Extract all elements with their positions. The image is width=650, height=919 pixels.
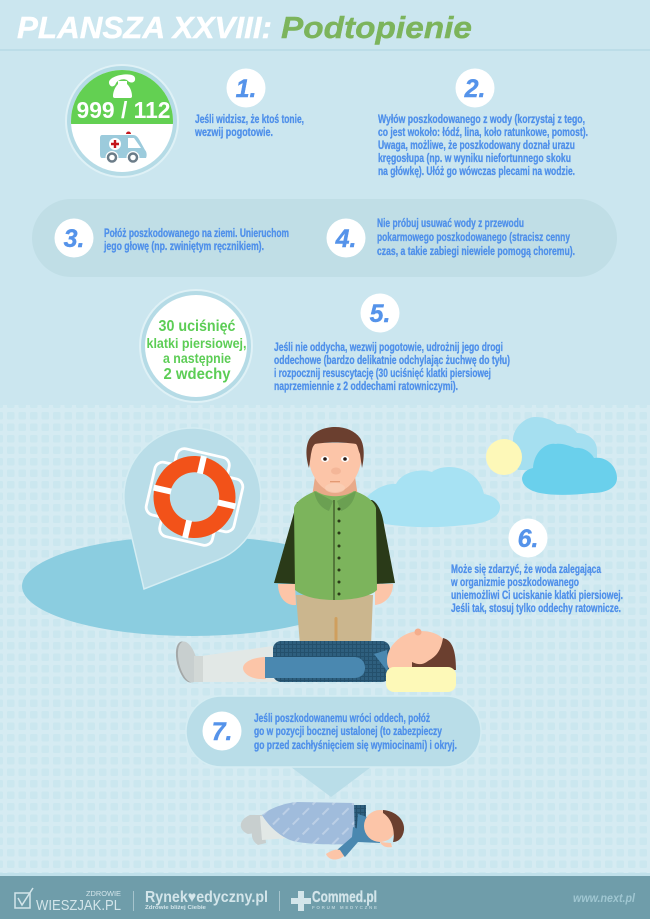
emergency number badge (65, 64, 179, 178)
head (387, 631, 452, 673)
step 4 text (377, 216, 575, 258)
logo: Commed: FORUM MEDYCZNE (312, 905, 377, 910)
logo: Rynek Medyczny: Rynek♥edyczny.pl (145, 889, 268, 906)
title: Podtopienie (281, 10, 472, 45)
step 7 text: go przed zachłyśnięciem się wymiocinami) i okryj. (254, 738, 457, 752)
green vest (294, 491, 377, 600)
step 7 number: 7. (212, 718, 232, 746)
step 2 text: kręgosłupa (np. w wyniku niefortunnego skoku (378, 151, 571, 165)
step 2 text (378, 112, 588, 178)
CPR badge (139, 289, 253, 403)
neck (312, 470, 358, 497)
step 3 text: Połóż poszkodowanego na ziemi. Unieruchom (104, 226, 289, 240)
CPR badge: klatki piersiowej, (146, 335, 246, 351)
step 6 text (450, 562, 623, 615)
step 1 text (194, 112, 304, 139)
standing man (274, 427, 395, 645)
logo: Commed: Commed.pl (312, 889, 377, 906)
shoe (172, 639, 200, 685)
step 2 text: na główkę). Ułóż go wówczas plecami na wodzie. (378, 164, 575, 178)
logo: Commed (291, 889, 377, 911)
step 6 number (508, 518, 548, 558)
trousers (296, 595, 373, 645)
CPR badge: a następnie (163, 351, 231, 366)
step 1 number: 1. (236, 75, 256, 103)
website address: www.next.pl (573, 893, 636, 905)
lying man (172, 628, 456, 692)
step 7 text: go w pozycji bocznej ustalonej (to zabezpieczy (254, 724, 442, 738)
panel: steps 3 and 4 (32, 199, 617, 277)
head (364, 810, 396, 842)
logo: Zdrowie Wiesz Jak: ZDROWIE (86, 889, 121, 898)
arm (265, 657, 365, 678)
blanket (262, 802, 355, 844)
cloud: large light (367, 467, 500, 527)
icon: telephone (109, 74, 135, 98)
step 7 text: Jeśli poszkodowanemu wróci oddech, połóż (254, 711, 430, 725)
trousers (194, 646, 278, 682)
CPR badge: 2 wdechy (164, 366, 231, 383)
step 5 text (274, 340, 510, 393)
icon: lifebuoy (141, 443, 248, 551)
step 3 text (103, 226, 289, 253)
person in recovery position (241, 802, 404, 860)
shoes (241, 815, 263, 834)
step 4 number (326, 218, 366, 258)
CPR badge: 30 uciśnięć (158, 318, 236, 335)
hands (278, 584, 393, 605)
step 7 number (202, 712, 242, 750)
phone numbers: 999 / 112 (76, 97, 170, 123)
head (309, 443, 361, 492)
step 5 text: i rozpocznij resuscytację (30 uciśnięć klatki piersiowej (274, 366, 491, 380)
step 4 text: Nie próbuj usuwać wody z przewodu (377, 216, 524, 230)
step 4 text: czas, a takie zabiegi niewiele pomogą choremu). (377, 244, 575, 258)
footer (0, 873, 650, 919)
eyes (321, 456, 329, 462)
step 6 number: 6. (518, 525, 538, 553)
hand (243, 657, 266, 679)
lower hand (380, 842, 392, 847)
legs (260, 816, 290, 840)
step 1 text: wezwij pogotowie. (194, 125, 273, 139)
lifebuoy pin (124, 428, 261, 589)
shirt (350, 805, 366, 835)
jacket (273, 641, 390, 682)
cloud: front (522, 444, 617, 495)
step 5 text: naprzemiennie z 2 oddechami ratowniczymi). (274, 379, 458, 393)
step 1 text: Jeśli widzisz, że ktoś tonie, (195, 112, 304, 126)
title: PLANSZA XXVIII: (17, 10, 272, 45)
collar (374, 650, 388, 672)
logo: Zdrowie Wiesz Jak: WIESZJAK.PL (36, 897, 121, 914)
step 6 text: w organizmie poszkodowanego (450, 575, 579, 589)
icon: ambulance (100, 132, 147, 164)
hair (412, 638, 456, 670)
title (17, 10, 472, 45)
step 2 number: 2. (464, 75, 485, 103)
hand (326, 850, 344, 860)
nose (331, 468, 341, 474)
step 2 text: Uwaga, możliwe, że poszkodowany doznał urazu (378, 138, 575, 152)
panel: step 7 (186, 696, 481, 797)
logo: Zdrowie Wiesz Jak (15, 888, 121, 914)
step 5 text: Jeśli nie oddycha, wezwij pogotowie, udrożnij jego drogi (274, 340, 503, 354)
pillow (386, 667, 456, 692)
step 5 text: oddechowe (bardzo delikatnie odchylając żuchwę do tyłu) (274, 353, 510, 367)
sleeves (274, 500, 395, 584)
mouth (330, 481, 340, 482)
step 3 text: jego głowę (np. zwiniętym ręcznikiem). (103, 239, 264, 253)
step 3 number (54, 218, 94, 258)
step 3 number: 3. (64, 225, 84, 253)
step 4 number: 4. (335, 225, 356, 253)
step 1 number (226, 68, 266, 108)
hair (306, 427, 364, 468)
step 2 number (456, 68, 494, 108)
step 5 number: 5. (370, 300, 390, 328)
step 5 number (360, 294, 400, 332)
arm (337, 827, 380, 857)
collar (314, 491, 356, 511)
cloud: pale back (512, 417, 597, 470)
step 4 text: pokarmowego poszkodowanego (stracisz cenny (377, 230, 570, 244)
water pool (22, 536, 362, 636)
sun (486, 439, 522, 475)
step 7 text (254, 711, 457, 752)
logo: Rynek Medyczny: Zdrowie bliżej Ciebie (145, 905, 206, 911)
